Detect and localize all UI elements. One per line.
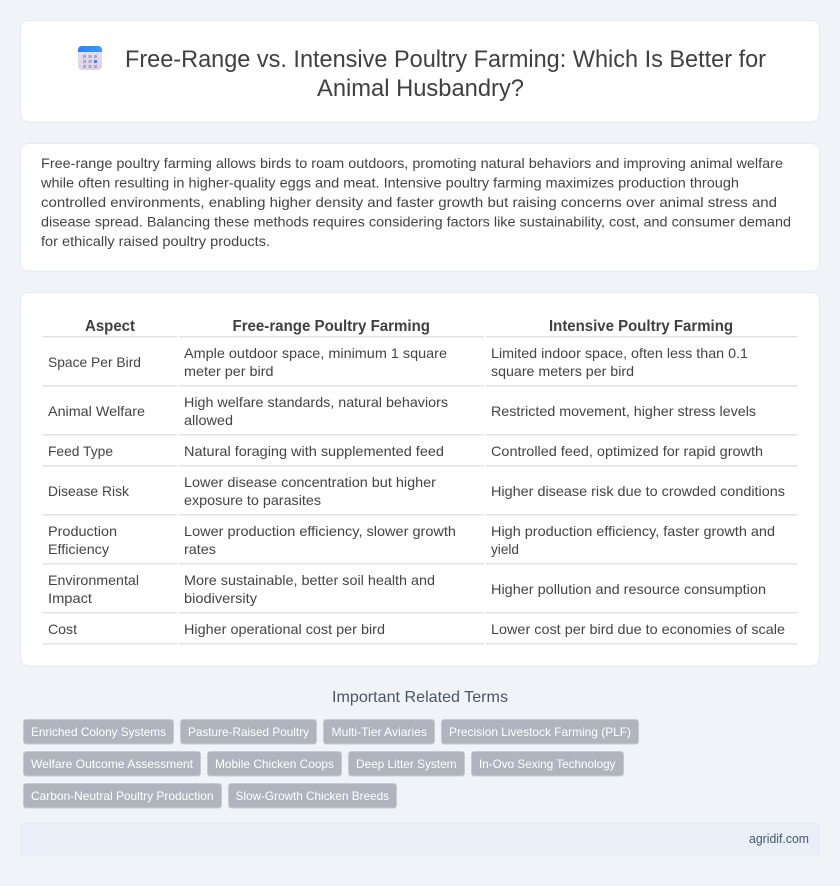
row: environmental impact: Higher pollution and resource consumption <box>491 581 766 597</box>
row: disease risk: exposure to parasites <box>184 492 321 508</box>
intro paragraph: disease spread. Balancing these methods requires considering factors like sustainability, cost, and consumer demand <box>41 214 791 230</box>
row: feed type <box>43 443 797 466</box>
panel: comparison table <box>20 292 820 666</box>
row: environmental impact: Environmental <box>48 572 139 588</box>
table header row: Intensive Poultry Farming <box>549 318 733 335</box>
intro paragraph: Free-range poultry farming allows birds to roam outdoors, promoting natural behaviors and improving animal welfare <box>41 155 783 171</box>
tag <box>180 720 316 744</box>
tag: Welfare Outcome Assessment <box>31 757 194 771</box>
row: feed type: Controlled feed, optimized for rapid growth <box>491 443 763 459</box>
tag: Enriched Colony Systems <box>31 725 166 739</box>
row: animal welfare: allowed <box>184 412 233 428</box>
row: space per bird: meter per bird <box>184 363 274 379</box>
tag: Multi-Tier Aviaries <box>332 725 427 739</box>
row: feed type: Feed Type <box>48 443 113 459</box>
row: production efficiency: Production <box>48 523 117 539</box>
row: feed type: Natural foraging with supplemented feed <box>184 443 444 459</box>
tag <box>442 720 638 744</box>
footer <box>20 822 820 856</box>
row: disease risk <box>43 474 797 516</box>
icon: calendar <box>78 46 102 70</box>
row: disease risk: Lower disease concentration but higher <box>184 474 436 490</box>
tag <box>208 752 342 776</box>
intro paragraph: while often resulting in higher-quality eggs and meat. Intensive poultry farming maximizes production through <box>40 174 739 190</box>
intro paragraph <box>40 155 791 249</box>
tag: Precision Livestock Farming (PLF) <box>449 725 631 739</box>
row: production efficiency: Lower production efficiency, slower growth <box>184 523 456 539</box>
row: cost: Lower cost per bird due to economies of scale <box>491 621 785 637</box>
row: cost: Cost <box>48 621 77 637</box>
footer: agridif.com <box>749 831 809 846</box>
tag: Pasture-Raised Poultry <box>188 725 309 739</box>
intro paragraph: for ethically raised poultry products. <box>41 233 270 249</box>
row: production efficiency: High production efficiency, faster growth and <box>491 523 775 539</box>
title <box>125 46 766 102</box>
row: environmental impact: biodiversity <box>184 590 257 606</box>
row: space per bird: square meters per bird <box>491 363 634 379</box>
table header row <box>43 318 797 338</box>
row: space per bird <box>43 345 797 386</box>
tag: Carbon-Neutral Poultry Production <box>31 789 214 803</box>
row: environmental impact <box>43 572 797 614</box>
tag <box>24 720 174 744</box>
tag <box>228 784 396 808</box>
row: production efficiency: Efficiency <box>48 541 109 557</box>
tag group: related terms <box>24 720 638 808</box>
row: animal welfare: Restricted movement, higher stress levels <box>491 403 756 419</box>
tag: Mobile Chicken Coops <box>215 757 334 771</box>
row: environmental impact: More sustainable, better soil health and <box>184 572 435 588</box>
row: disease risk: Disease Risk <box>48 483 130 499</box>
panel: header <box>20 20 820 122</box>
row: animal welfare <box>43 394 797 436</box>
tag <box>472 752 624 776</box>
panel: introduction <box>20 144 820 271</box>
row: space per bird: Ample outdoor space, minimum 1 square <box>184 345 447 361</box>
row: space per bird: Limited indoor space, often less than 0.1 <box>491 345 748 361</box>
tag <box>324 720 434 744</box>
tag <box>24 752 200 776</box>
intro paragraph: controlled environments, enabling higher density and faster growth but raising concerns over animal stress and <box>41 194 777 210</box>
row: animal welfare: Animal Welfare <box>48 403 145 419</box>
row: environmental impact: Impact <box>48 590 92 606</box>
title: Free-Range vs. Intensive Poultry Farming: Which Is Better for <box>125 46 766 73</box>
table header row: Free-range Poultry Farming <box>232 318 430 335</box>
row: production efficiency: rates <box>184 541 216 557</box>
row: production efficiency <box>43 523 797 564</box>
row: space per bird: Space Per Bird <box>48 354 141 370</box>
tag: Slow-Growth Chicken Breeds <box>236 789 389 803</box>
table header row: Aspect <box>85 318 136 335</box>
row: cost: Higher operational cost per bird <box>184 621 385 637</box>
row: production efficiency: yield <box>491 541 519 557</box>
heading: related terms: Important Related Terms <box>332 689 508 706</box>
row: disease risk: Higher disease risk due to crowded conditions <box>491 483 785 499</box>
tag <box>24 784 222 808</box>
title: Animal Husbandry? <box>317 75 524 102</box>
row: animal welfare: High welfare standards, natural behaviors <box>184 394 448 410</box>
tag: Deep Litter System <box>356 757 456 771</box>
tag <box>348 752 464 776</box>
tag: In-Ovo Sexing Technology <box>479 757 616 771</box>
row: cost <box>43 621 797 644</box>
